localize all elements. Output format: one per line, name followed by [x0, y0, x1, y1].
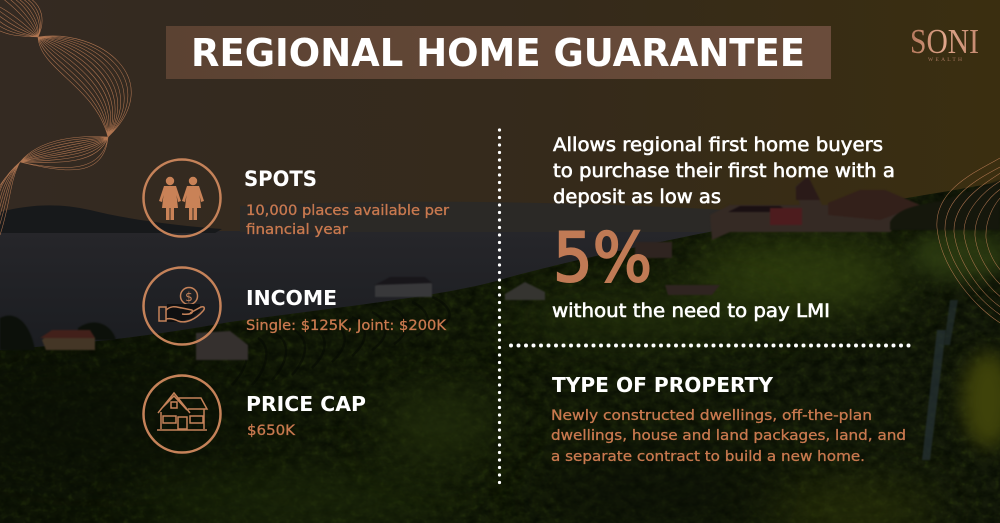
- price cap value: $650K: [247, 423, 295, 439]
- spots description: [246, 203, 449, 238]
- title: REGIONAL HOME GUARANTEE: [191, 31, 805, 75]
- spots description: financial year: [246, 222, 348, 238]
- type of property description: Newly constructed dwellings, off-the-plan: [551, 408, 872, 424]
- lead text: Allows regional first home buyers: [553, 135, 883, 156]
- land glow patches: [0, 229, 1000, 523]
- logo: Soni Wealth: WEALTH: [928, 57, 962, 63]
- type of property description: dwellings, house and land packages, land, and: [551, 428, 906, 444]
- icon: two people: [144, 160, 220, 236]
- type of property description: a separate contract to build a new home.: [551, 449, 865, 465]
- lead text: [553, 135, 895, 208]
- income description: Single: $125K, Joint: $200K: [246, 318, 447, 334]
- lead text: to purchase their first home with a: [553, 161, 895, 182]
- spots heading: SPOTS: [244, 167, 317, 191]
- price cap heading: PRICE CAP: [246, 392, 366, 416]
- horizontal dotted divider: [511, 344, 915, 348]
- icon: hand holding coin: [144, 268, 220, 344]
- lead text: deposit as low as: [553, 187, 721, 208]
- big figure: 5%: 5%: [553, 219, 652, 298]
- spots description: 10,000 places available per: [246, 203, 449, 219]
- type of property heading: TYPE OF PROPERTY: [552, 373, 774, 397]
- LMI note: without the need to pay LMI: [552, 301, 830, 322]
- decorative ribbon: top left: [0, 0, 131, 235]
- title banner: [166, 26, 831, 79]
- type of property description: [551, 408, 906, 465]
- logo: Soni Wealth: SONI: [910, 22, 979, 61]
- vertical dotted divider: [498, 130, 501, 484]
- decorative ribbon: right edge: [937, 157, 1000, 324]
- icon: hand holding coin: $: [185, 290, 193, 304]
- icon: house: [144, 376, 220, 452]
- income heading: INCOME: [246, 286, 337, 310]
